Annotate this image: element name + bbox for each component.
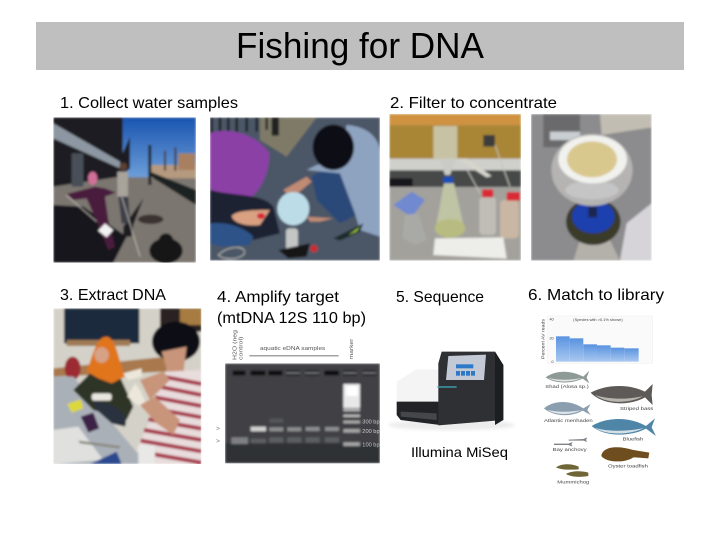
heading: step 4 xyxy=(217,289,366,327)
photo: sampling on the waterfront promenade xyxy=(53,117,196,263)
fish: shad xyxy=(545,371,589,389)
bar chart: percent of reads by species: Percent AV reads xyxy=(540,319,545,359)
bar chart: percent of reads by species: 20 xyxy=(549,335,555,340)
gel panel: 100 bp xyxy=(362,443,380,449)
fish: bluefish: Bluefish xyxy=(623,437,644,442)
heading: step 4: (mtDNA 12S 110 bp) xyxy=(217,310,366,327)
fish: striped bass xyxy=(591,384,654,411)
photo: vacuum filtration apparatus xyxy=(389,114,521,261)
fish: bluefish xyxy=(592,418,656,442)
fish: striped bass: Striped bass xyxy=(620,406,654,411)
gel electrophoresis image xyxy=(216,330,380,463)
fish: oyster toadfish: Oyster toadfish xyxy=(608,464,648,469)
photo: researchers extracting DNA at a lab bench xyxy=(53,308,201,464)
gel panel: 200 bp xyxy=(362,429,380,435)
bar chart: percent of reads by species: 0 xyxy=(551,359,554,364)
fish: bay anchovy: Bay anchovy xyxy=(553,447,587,452)
label: Illumina MiSeq: Illumina MiSeq xyxy=(411,444,508,460)
gel band markers: > xyxy=(216,426,220,433)
panel: species library xyxy=(540,316,656,484)
gel panel xyxy=(225,363,380,463)
heading: step 4: 4. Amplify target xyxy=(217,289,340,306)
gel lane labels: H2O (neg xyxy=(233,330,239,360)
gel lane labels: control) xyxy=(239,337,245,360)
heading: step 1: 1. Collect water samples xyxy=(60,95,238,112)
bar chart: percent of reads by species xyxy=(540,316,653,364)
gel band markers xyxy=(216,426,220,445)
photo: filter disc on funnel xyxy=(531,114,652,261)
photo: pouring water into a sample bottle xyxy=(210,117,380,261)
illustration: Illumina MiSeq sequencer xyxy=(388,352,515,430)
heading: step 6: 6. Match to library xyxy=(528,287,664,304)
fish: shad: Shad (Alosa sp.) xyxy=(545,384,589,389)
heading: step 3: 3. Extract DNA xyxy=(60,287,166,304)
gel lane labels: aquatic eDNA samples xyxy=(260,346,325,352)
title banner: Fishing for DNA xyxy=(236,25,484,66)
fish: Atlantic menhaden: Atlantic menhaden xyxy=(544,418,593,423)
fish: mummichog xyxy=(556,464,590,484)
title banner xyxy=(36,22,684,70)
gel band markers: > xyxy=(216,438,220,445)
bar chart: percent of reads by species: (Species with >0.1% shown) xyxy=(573,318,623,322)
gel lane labels: marker xyxy=(349,339,355,359)
fish: oyster toadfish xyxy=(601,447,649,469)
gel lane labels xyxy=(233,330,355,360)
heading: step 2: 2. Filter to concentrate xyxy=(390,95,557,112)
heading: step 5: 5. Sequence xyxy=(396,289,484,306)
fish: bay anchovy xyxy=(553,437,587,452)
fish: Atlantic menhaden xyxy=(544,402,593,423)
fish: mummichog: Mummichog xyxy=(557,479,590,484)
gel panel: 300 bp xyxy=(362,420,380,426)
bar chart: percent of reads by species: 40 xyxy=(549,316,555,321)
